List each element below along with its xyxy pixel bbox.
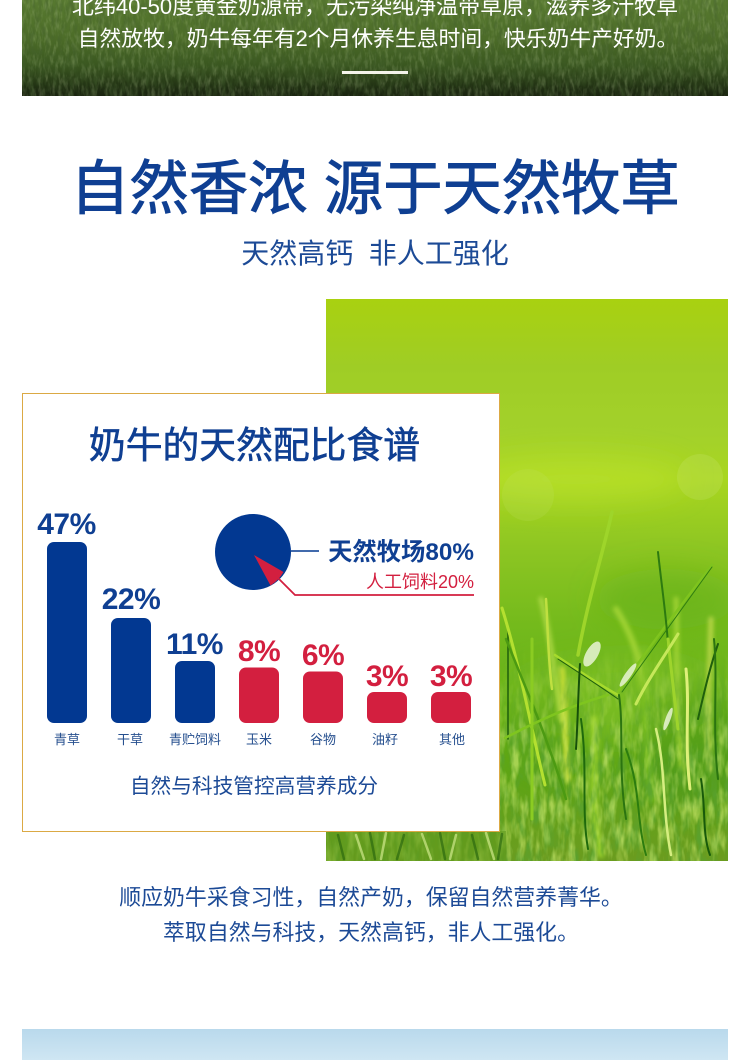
card footer text: 自然与科技管控高营养成分 bbox=[130, 775, 378, 798]
grass texture bbox=[22, 0, 728, 96]
percentage values: 3% bbox=[366, 660, 408, 693]
label: artificial 20%: 人工饲料20% bbox=[366, 572, 474, 592]
category labels: 谷物 bbox=[310, 732, 336, 747]
category labels: 玉米 bbox=[246, 732, 272, 747]
leader line: artificial bbox=[278, 578, 474, 595]
pie: natural pasture bbox=[215, 514, 291, 590]
percentage values: 6% bbox=[302, 639, 344, 672]
percentage values: 11% bbox=[166, 628, 223, 661]
top grass banner bbox=[22, 0, 728, 96]
closing paragraph bbox=[119, 885, 623, 945]
category labels bbox=[54, 732, 465, 747]
banner divider bbox=[342, 71, 408, 74]
closing paragraph: 顺应奶牛采食习性，自然产奶，保留自然营养菁华。 bbox=[119, 885, 623, 910]
category labels: 青草 bbox=[54, 732, 80, 747]
soft out-of-focus blades bbox=[541, 599, 711, 854]
grass blades bbox=[502, 512, 718, 855]
subheading: 天然高钙 非人工强化 bbox=[241, 238, 509, 269]
percentage values bbox=[37, 508, 472, 693]
sunlit highlights bbox=[580, 639, 674, 731]
percentage values: 8% bbox=[238, 635, 280, 668]
soft background glow bbox=[466, 457, 750, 809]
bars bbox=[47, 542, 471, 723]
pie chart with legend bbox=[215, 514, 474, 596]
percentage values: 47% bbox=[37, 508, 96, 541]
bottom grass strip bbox=[326, 831, 506, 861]
percentage values: 22% bbox=[102, 583, 160, 616]
pie slice: artificial feed bbox=[254, 555, 284, 586]
closing paragraph: 萃取自然与科技，天然高钙，非人工强化。 bbox=[163, 920, 579, 945]
banner text bbox=[72, 0, 678, 50]
category labels: 青贮饲料 bbox=[169, 732, 221, 747]
banner text: 自然放牧，奶牛每年有2个月休养生息时间，快乐奶牛产好奶。 bbox=[78, 26, 678, 50]
category labels: 干草 bbox=[117, 732, 143, 747]
percentage values: 3% bbox=[430, 660, 472, 693]
category labels: 其他 bbox=[439, 732, 465, 747]
category labels: 油籽 bbox=[372, 732, 398, 747]
bokeh circles bbox=[677, 454, 723, 500]
leader line: natural bbox=[291, 550, 319, 552]
bottom sky image strip bbox=[22, 1029, 728, 1060]
foreground grass texture bbox=[500, 678, 728, 861]
bar chart bbox=[37, 508, 472, 747]
main heading: 自然香浓 源于天然牧草 bbox=[70, 155, 680, 222]
panel: feed recipe card bbox=[22, 393, 500, 832]
card title: 奶牛的天然配比食谱 bbox=[89, 425, 420, 466]
photo: green grass bbox=[326, 299, 728, 861]
label: natural 80%: 天然牧场80% bbox=[328, 539, 474, 566]
